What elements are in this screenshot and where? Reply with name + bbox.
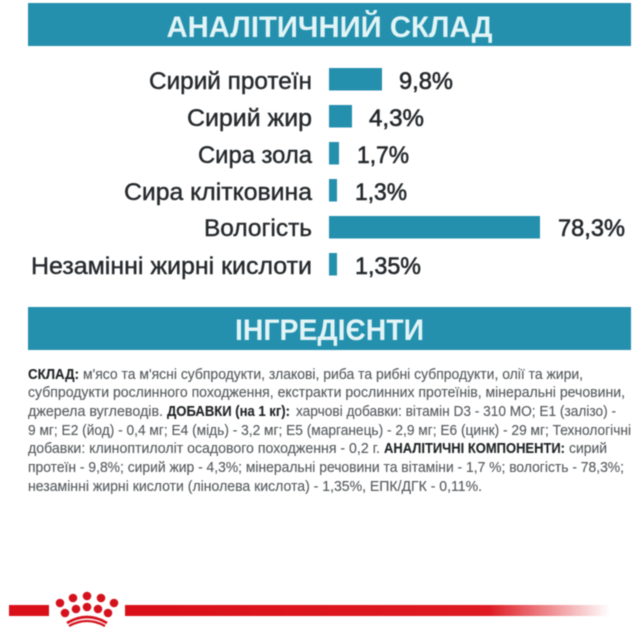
left red bar — [9, 605, 49, 616]
row: crude ash — [198, 142, 409, 169]
row: moisture: 78,3% — [558, 215, 625, 242]
text block: ingredients list: джерела вуглеводів. — [28, 403, 163, 420]
heading banner: ingredients — [28, 307, 631, 350]
row: crude fibre: 1,3% — [355, 179, 407, 206]
row: crude ash: Сира зола — [198, 142, 313, 169]
heading banner: analytical composition — [28, 3, 631, 46]
text block: ingredients list: ДОБАВКИ (на 1 кг): — [167, 403, 290, 420]
row: crude fat: Сирий жир — [187, 105, 312, 132]
row: moisture: Вологість — [204, 215, 312, 242]
text block: ingredients list: АНАЛІТИЧНІ КОМПОНЕНТИ: — [384, 440, 565, 457]
row: crude protein — [149, 68, 453, 95]
text block: ingredients list: м'ясо та м'ясні субпродукти, злакові, риба та рибні субпродукти, олії та жири, — [83, 366, 583, 383]
right red bar — [125, 605, 610, 616]
row: crude protein: Сирий протеїн — [149, 68, 312, 95]
text block: ingredients list: СКЛАД: — [28, 366, 79, 383]
text block: ingredients list: харчові добавки: вітамін D3 - 310 МО; Е1 (залізо) - — [296, 403, 616, 420]
row: crude fibre: Сира клітковина — [124, 179, 313, 206]
row: essential fatty acids: Незамінні жирні кислоти — [31, 253, 312, 280]
row: crude fat: 4,3% — [369, 105, 424, 132]
row: moisture — [204, 215, 625, 242]
row: crude protein: 9,8% — [399, 68, 453, 95]
text block: ingredients list: добавки: клиноптилоліт осадового походження - 0,2 г. — [28, 440, 380, 457]
bar chart: composition percentages — [31, 68, 625, 280]
text block: ingredients list: незамінні жирні кислоти (лінолева кислота) - 1,35%, ЕПК/ДГК - 0,11%. — [28, 478, 482, 495]
text block: ingredients list — [28, 366, 631, 495]
heading banner: analytical composition: АНАЛІТИЧНИЙ СКЛАД — [166, 10, 492, 44]
row: essential fatty acids — [31, 253, 421, 280]
row: crude fibre — [124, 179, 407, 206]
row: crude ash: 1,7% — [357, 142, 409, 169]
row: crude fat — [187, 105, 424, 132]
icon: crown logo — [56, 592, 118, 626]
heading banner: ingredients: ІНГРЕДІЄНТИ — [235, 314, 424, 347]
footer: red brand line with crown logo — [9, 592, 610, 626]
row: essential fatty acids: 1,35% — [355, 253, 421, 280]
text block: ingredients list: сирий — [569, 440, 607, 457]
